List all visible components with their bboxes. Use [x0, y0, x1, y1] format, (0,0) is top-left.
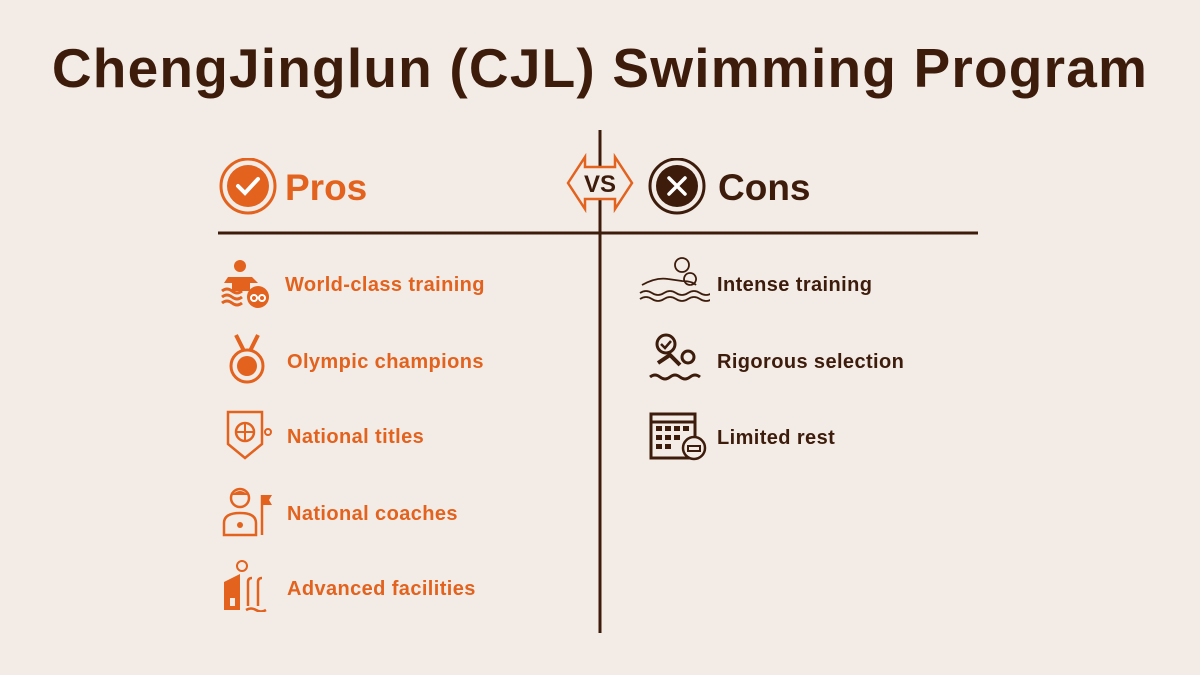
item: national coaches — [222, 488, 458, 536]
vs arrow: VS — [584, 171, 616, 198]
cons list — [640, 257, 904, 460]
vs arrow — [566, 153, 634, 213]
item: advanced facilities — [224, 560, 476, 612]
icon: check circle — [220, 158, 276, 214]
item: intense training — [640, 257, 872, 302]
pros heading: Pros — [285, 167, 367, 208]
pros list — [221, 260, 485, 612]
item: limited rest — [650, 412, 835, 460]
item: rigorous selection — [649, 334, 904, 380]
item: advanced facilities: Advanced facilities — [287, 578, 476, 600]
cons heading — [648, 158, 810, 214]
item: national titles: National titles — [287, 426, 424, 448]
item: rigorous selection: Rigorous selection — [717, 351, 904, 373]
cons heading: Cons — [718, 167, 810, 208]
item: limited rest: Limited rest — [717, 427, 835, 449]
item: olympic champions — [230, 334, 484, 384]
item: national coaches: National coaches — [287, 503, 458, 525]
item: intense training: Intense training — [717, 274, 872, 296]
pros heading — [220, 158, 367, 214]
item: national titles — [226, 410, 424, 460]
item: olympic champions: Olympic champions — [287, 351, 484, 373]
title: ChengJinglun (CJL) Swimming Program — [52, 37, 1148, 99]
item: world-class training: World-class training — [285, 274, 485, 296]
icon: x circle — [648, 158, 706, 214]
item: world-class training — [221, 260, 485, 308]
